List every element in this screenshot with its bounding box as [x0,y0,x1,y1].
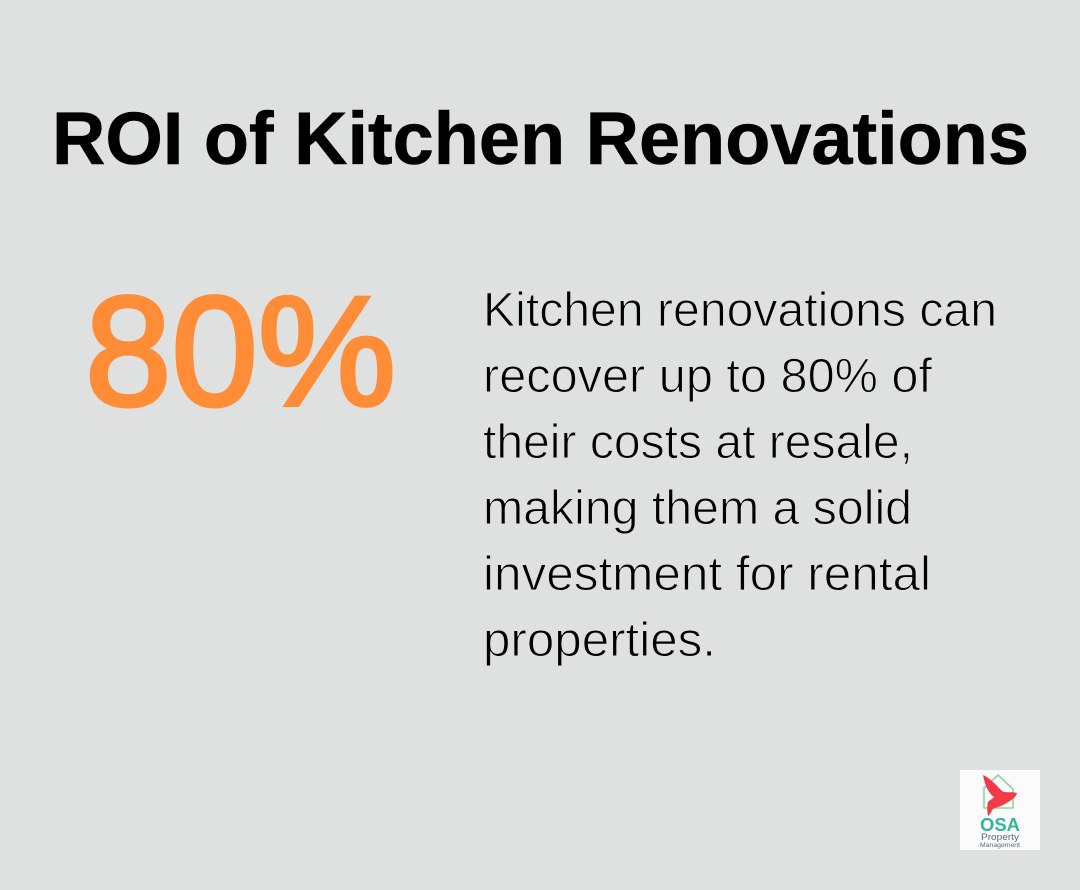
description text: their costs at resale, [483,416,913,469]
logo tagline: Management: Management [980,842,1020,849]
description text: properties. [483,614,716,667]
description text: making them a solid [483,482,912,535]
description text: investment for rental [483,548,931,601]
title: ROI of Kitchen Renovations [52,97,1029,180]
description text: Kitchen renovations can [483,284,997,337]
logo tagline: Property: Property [981,832,1020,842]
logo wordmark: OSA [980,815,1020,835]
description text [483,284,997,667]
description text: recover up to 80% of [483,350,933,403]
logo: OSA Property Management [960,770,1040,850]
big stat: 80%: 80% [85,265,396,439]
icon: house outline [984,775,1013,808]
icon: red bird [983,775,1017,816]
